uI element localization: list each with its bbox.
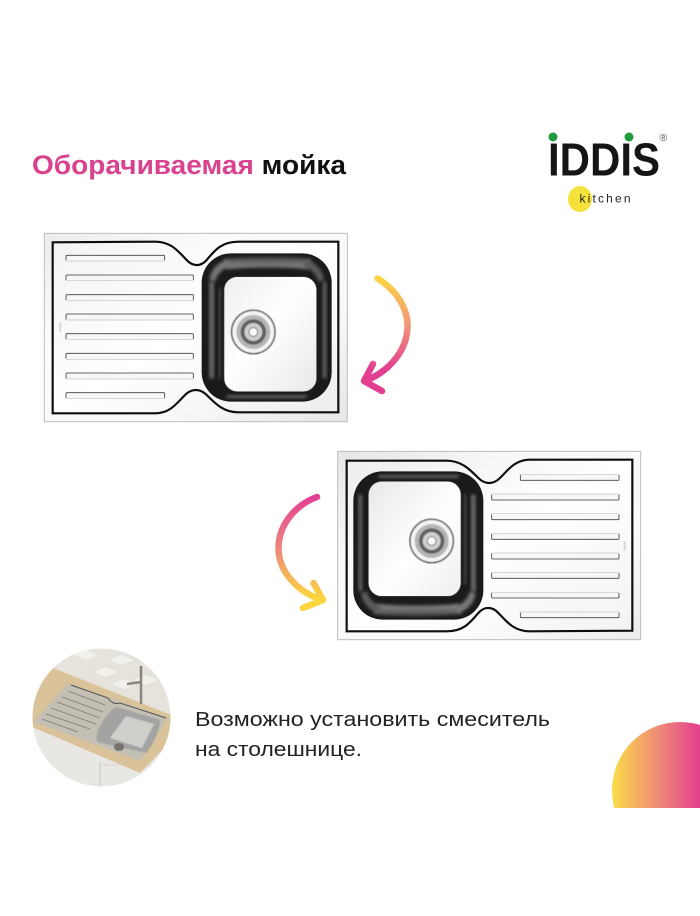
title: Оборачиваемая мойка [32,150,347,180]
logo yellow blob [568,186,592,212]
arrow: counter-clockwise down to the right [278,497,323,608]
photo wall tiles [32,648,170,715]
logo green dot left [548,132,558,142]
registered mark: ® [660,132,668,144]
description text [195,708,550,761]
photo sink deck [34,683,168,761]
logo kitchen text: kitchen [580,192,630,206]
sink: top, drainboard left [44,233,347,422]
photo bowl [97,707,160,753]
description text: Возможно установить смеситель [195,708,550,731]
description text: на столешнице. [195,738,362,761]
photo faucet [127,666,141,704]
decorative gradient circle [612,722,700,808]
photo drain [114,743,124,751]
photo worktop [30,668,174,773]
logo: IDDIS kitchen [548,132,668,212]
sink: bottom, rotated 180 degrees [338,451,641,640]
logo wordmark: IDDIS [548,134,660,186]
logo green dot right [624,132,634,142]
arrow: clockwise down to the left [364,278,408,391]
photo cabinet [33,728,162,786]
photo: installed sink on a worktop [30,646,174,790]
